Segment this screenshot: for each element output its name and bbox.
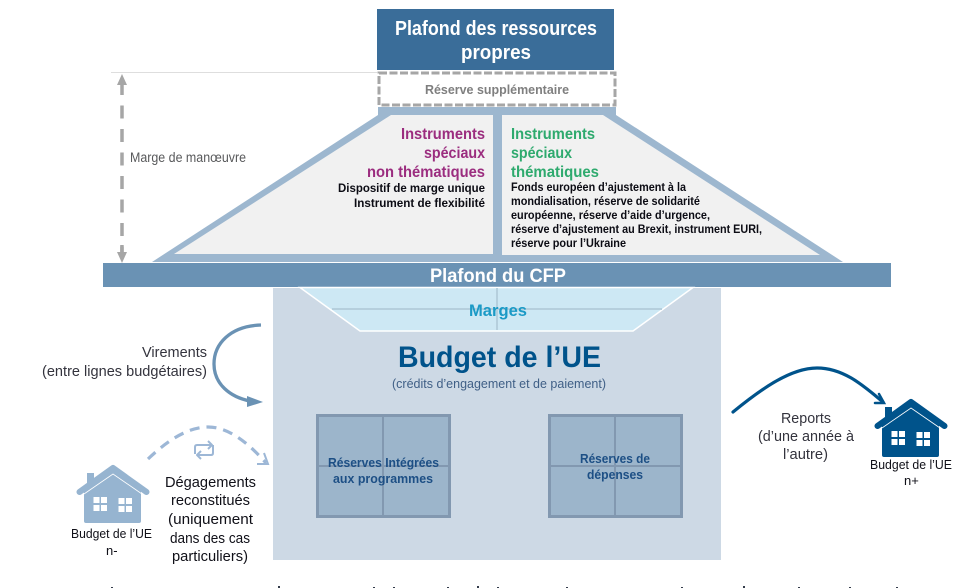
reserve supplementaire box — [379, 73, 615, 105]
label: budget n-1: Budget de l’UE — [71, 526, 152, 541]
panel: instruments non thematiques: Dispositif de marge unique — [338, 183, 485, 195]
panel: plafond des ressources propres — [377, 9, 614, 70]
panel: instruments thematiques — [502, 115, 820, 255]
label: virements: Virements — [142, 344, 207, 361]
label: virements: (entre lignes budgétaires) — [42, 363, 207, 380]
panel: instruments thematiques: réserve pour l’Ukraine — [511, 238, 626, 250]
icon: recycle — [195, 441, 213, 459]
label: budget n+1: n+ — [904, 473, 919, 488]
panel: instruments thematiques: spéciaux — [511, 145, 572, 162]
box: reserves de depenses: dépenses — [587, 467, 643, 482]
icon: house n+1 — [878, 402, 944, 457]
box: reserves integrees: Réserves Intégrées — [328, 455, 439, 470]
label: degagements reconstitues: particuliers) — [172, 548, 248, 565]
label: degagements reconstitues: Dégagements — [165, 474, 256, 491]
label: reports: Reports — [781, 410, 831, 427]
bar: plafond du CFP: Plafond du CFP — [430, 266, 566, 287]
box: reserves integrees: aux programmes — [333, 471, 433, 486]
panel: budget de l'UE — [273, 288, 721, 560]
label: degagements reconstitues: dans des cas — [170, 530, 250, 547]
panel: trapeze des instruments speciaux — [152, 107, 843, 262]
icon: house n-1 — [80, 468, 146, 523]
arrow: virements — [214, 325, 263, 407]
panel: plafond des ressources propres: propres — [461, 41, 531, 64]
label: marge de manoeuvre: Marge de manœuvre — [130, 150, 246, 165]
panel: instruments thematiques: Fonds européen d’ajustement à la — [511, 182, 687, 194]
panel: instruments thematiques: thématiques — [511, 164, 599, 181]
panel: plafond des ressources propres: Plafond des ressources — [395, 17, 597, 40]
panel: instruments thematiques: mondialisation, réserve de solidarité — [511, 196, 700, 208]
box: reserves integrees — [318, 416, 450, 516]
panel: instruments non thematiques — [174, 115, 493, 254]
reserve supplementaire box: Réserve supplémentaire — [425, 82, 569, 97]
label: budget n-1: n- — [106, 543, 118, 558]
panel: instruments thematiques: européenne, réserve d’aide d’urgence, — [511, 210, 710, 222]
arrow: reports — [733, 368, 884, 412]
label: budget n+1 — [870, 457, 952, 488]
panel: instruments thematiques: réserve d’ajustement au Brexit, instrument EURI, — [511, 224, 762, 236]
box: reserves de depenses: Réserves de — [580, 451, 650, 466]
panel: instruments non thematiques: spéciaux — [424, 145, 485, 162]
panel: instruments non thematiques: Instrument de flexibilité — [354, 198, 485, 210]
label: degagements reconstitues: reconstitués — [171, 492, 250, 509]
panel: instruments non thematiques: Instruments — [401, 126, 485, 143]
label: reports: (d’une année à — [758, 428, 855, 445]
label: degagements reconstitues: (uniquement — [168, 511, 254, 528]
label: virements — [42, 344, 207, 380]
panel: instruments non thematiques: non thématiques — [367, 164, 485, 181]
heading: budget de l'UE: Budget de l’UE — [398, 341, 601, 374]
arrow: marge de manoeuvre — [117, 74, 127, 263]
box: reserves de depenses — [550, 416, 682, 516]
panel: marges — [300, 288, 693, 331]
subheading: credits: (crédits d’engagement et de paiement) — [392, 376, 606, 391]
panel: marges: Marges — [469, 301, 527, 320]
label: reports: l’autre) — [783, 446, 828, 463]
arrow: degagements reconstitues — [148, 427, 268, 464]
panel: instruments thematiques: Instruments — [511, 126, 595, 143]
label: budget n+1: Budget de l’UE — [870, 457, 952, 472]
bar: plafond du CFP — [103, 263, 891, 287]
label: degagements reconstitues — [165, 474, 256, 565]
label: reports — [758, 410, 855, 463]
label: budget n-1 — [71, 526, 152, 558]
